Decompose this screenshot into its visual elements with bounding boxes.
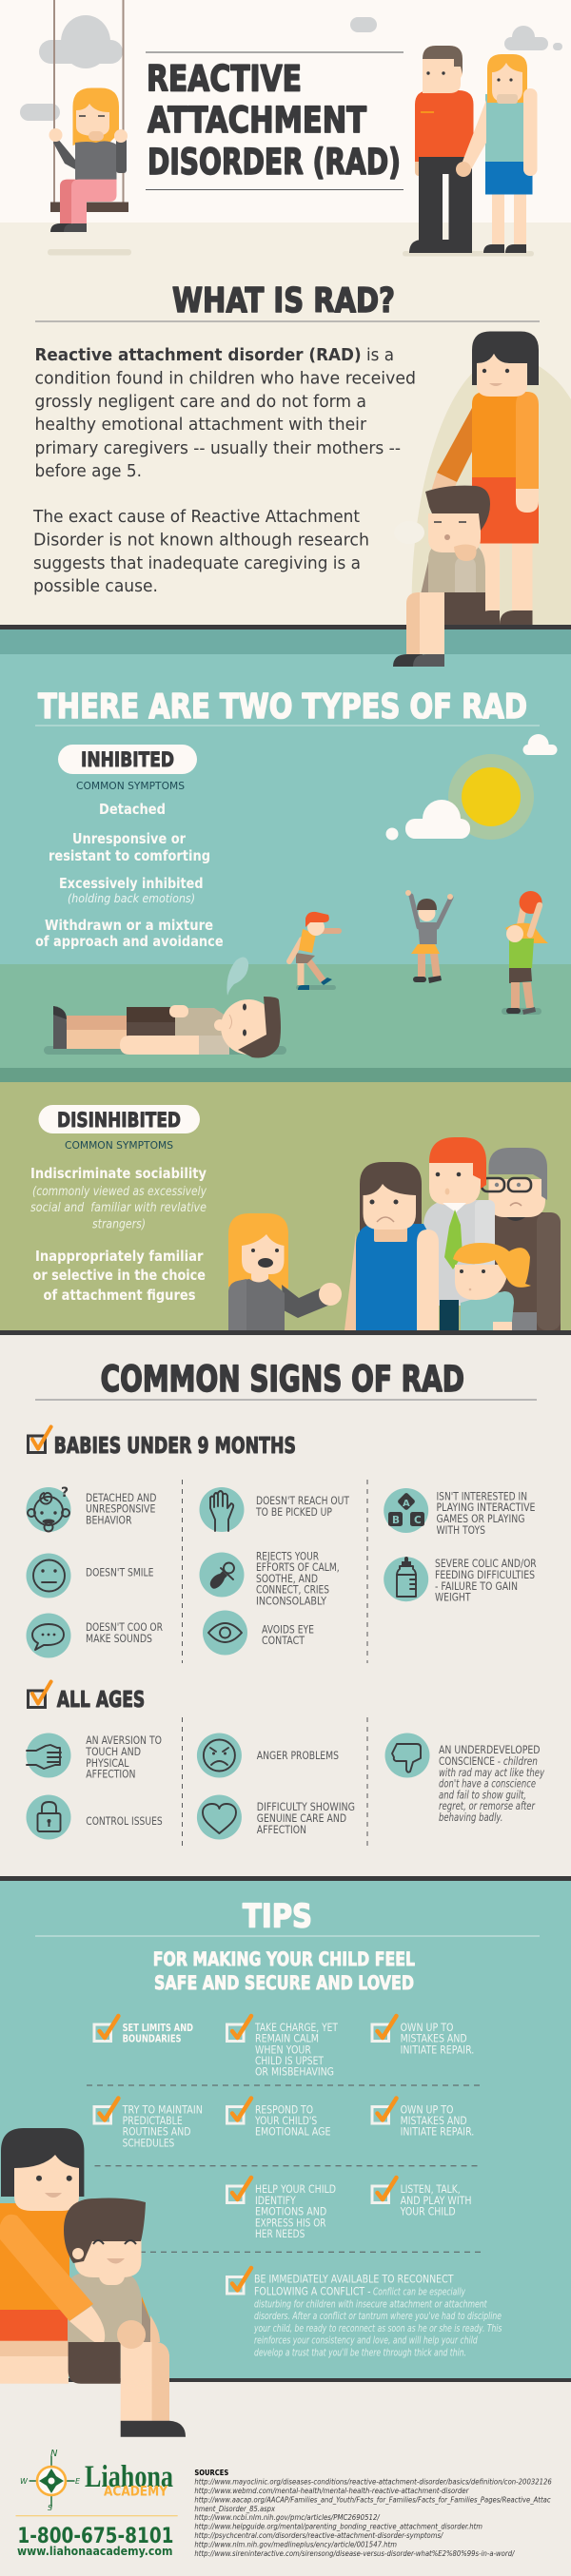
tip: set limits and boundaries: BOUNDARIES [123,2033,182,2045]
dashed column dividers: all ages [183,1717,367,1847]
tip: be immediately available: Conflict can be especially [373,2286,466,2297]
item: isn't interested: WITH TOYS [436,1523,485,1537]
item: severe colic: - FAILURE TO GAIN [435,1579,518,1593]
title [146,52,404,190]
panel: disinhibited symptoms: DISINHIBITED [57,1109,181,1132]
item: difficulty showing care [257,1800,355,1836]
panel: inhibited symptoms: Unresponsive or [72,830,187,847]
icon: baby with question mark [27,1485,70,1532]
panel: disinhibited symptoms: (commonly viewed as excessively [32,1185,207,1199]
illustration: mother and seated son [393,331,571,667]
tip: respond to emotional age: EMOTIONAL AGE [255,2125,331,2139]
tip: own up to mistakes: INITIATE REPAIR. [401,2043,474,2056]
item: detached and unresponsive [86,1491,157,1527]
heading: common signs of RAD: COMMON SIGNS OF RAD [101,1359,464,1400]
tip: take charge: REMAIN CALM [255,2032,319,2045]
item: underdeveloped conscience: regret, or remorse after [439,1799,536,1812]
icon: thumbs down [384,1733,430,1778]
contact: phone and website: 1-800-675-8101 [17,2525,174,2548]
tip: help identify emotions: EMOTIONS AND [255,2205,326,2218]
subheading: for making your child feel: SAFE AND SECURE AND LOVED [154,1972,414,1994]
logo: Liahona Academy compass: S [48,2504,52,2512]
tip: be immediately available: develop a trust that you'll be there through thick and thin. [254,2347,466,2358]
item: avoids eye contact: AVOIDS EYE [262,1622,314,1636]
tip: own up to mistakes [372,2016,474,2056]
contact: phone and website [15,2516,178,2558]
tip: be immediately available: FOLLOWING A CONFLICT - [254,2284,371,2297]
item: rejects your efforts: EFFORTS OF CALM, [256,1560,340,1574]
item: underdeveloped conscience: don't have a conscience [439,1777,536,1791]
item: rejects your efforts: REJECTS YOUR [256,1550,319,1563]
heading: tips: TIPS [243,1898,312,1936]
item: aversion to touch: TOUCH AND [85,1745,141,1758]
item: underdeveloped conscience: and fail to show guilt, [439,1788,526,1801]
tip: help identify emotions: HELP YOUR CHILD [255,2182,336,2196]
title: DISORDER (RAD) [148,142,401,183]
item: underdeveloped conscience: behaving badly. [439,1811,502,1824]
tip: listen, talk, play: YOUR CHILD [400,2205,456,2218]
tip: respond to emotional age: RESPOND TO [255,2102,313,2116]
item: underdeveloped conscience: CONSCIENCE - children [439,1754,538,1768]
tip: be immediately available: BE IMMEDIATELY AVAILABLE TO RECONNECT [254,2273,454,2286]
text block: definition: condition found in children who have received [34,369,416,388]
text block: sources: http://www.helpguide.org/mental/parenting_bonding_reactive_attachment_disorder.htm [194,2523,482,2531]
icon: neutral face [27,1554,70,1598]
item: severe colic: SEVERE COLIC AND/OR [435,1557,537,1570]
tip: set limits and boundaries [94,2016,193,2045]
icon: speech bubble [27,1613,70,1658]
subheading: for making your child feel [153,1948,415,1994]
panel: inhibited symptoms: Excessively inhibited [59,875,204,892]
item: rejects your efforts: INCONSOLABLY [256,1594,327,1607]
item: doesn't coo: MAKE SOUNDS [86,1632,152,1645]
tip: listen, talk, play [372,2178,472,2218]
text block: definition: Reactive attachment disorder (RAD) is a [34,346,394,365]
tip: predictable routines: SCHEDULES [123,2137,174,2150]
panel: disinhibited symptoms: of attachment figures [44,1287,196,1304]
tip: predictable routines: PREDICTABLE [123,2114,183,2127]
tip: listen, talk, play: AND PLAY WITH [401,2194,472,2207]
icon: baby bottle [384,1557,428,1601]
item: aversion to touch: AFFECTION [86,1768,135,1781]
text block: exact cause: possible cause. [33,577,158,596]
tip: take charge: WHEN YOUR [255,2043,311,2056]
text block: definition [34,346,416,481]
illustration: man and woman couple [403,46,537,257]
text block: definition: grossly negligent care and do not form a [34,393,366,412]
text block: definition: healthy emotional attachment with their [34,416,367,435]
tip: help identify emotions [226,2178,336,2240]
text block: sources: http://www.webmd.com/mental-health/mental-health-reactive-attachment-disorder [194,2487,469,2495]
tip: own up to mistakes: OWN UP TO [401,2021,453,2034]
icon: angry face [197,1733,242,1778]
tip: take charge: TAKE CHARGE, YET [254,2021,339,2034]
tip: respond to emotional age: YOUR CHILD'S [254,2114,317,2127]
panel: inhibited symptoms: COMMON SYMPTOMS [76,780,185,792]
subheading: all ages: ALL AGES [57,1688,145,1713]
logo: Liahona Academy compass: W [20,2477,29,2486]
tip: listen, talk, play: LISTEN, TALK, [401,2182,461,2196]
item: isn't interested [436,1489,535,1537]
item: rejects your efforts [256,1550,340,1607]
subheading: babies under 9 months [29,1426,296,1459]
text block: exact cause: suggests that inadequate caregiving is a [33,554,361,573]
item: rejects your efforts: CONNECT, CRIES [256,1583,329,1597]
item: aversion to touch: PHYSICAL [86,1756,129,1770]
title: ATTACHMENT [148,100,367,141]
item: isn't interested: GAMES OR PLAYING [436,1512,525,1525]
icon: pacifier [200,1552,244,1598]
text block: exact cause [32,508,369,596]
item: detached and unresponsive: DETACHED AND [86,1491,157,1504]
clouds: header [20,15,562,121]
text block: definition: before age 5. [34,462,142,481]
illustration: boy lying on the ground [44,957,286,1057]
item: rejects your efforts: SOOTHE, AND [256,1572,318,1585]
icon: ABC blocks [384,1488,428,1533]
panel: disinhibited symptoms: or selective in the choice [32,1267,206,1284]
title: REACTIVE [147,59,302,99]
item: avoids eye contact: CONTACT [262,1634,305,1647]
text block: exact cause: The exact cause of Reactive Attachment [32,508,360,527]
panel: disinhibited symptoms: Indiscriminate sociability [30,1165,207,1182]
illustration: child with outstretched arm [289,912,339,990]
tip: predictable routines [94,2098,203,2150]
tip: help identify emotions: EXPRESS HIS OR [255,2216,325,2229]
icon: eye [203,1611,247,1655]
illustration: girl on swing [48,0,131,255]
icon: padlock [27,1795,70,1839]
tip: own up to mistakes repeat: MISTAKES AND [401,2114,467,2127]
panel: disinhibited symptoms: social and familiar with revlative [30,1201,207,1215]
tip: be immediately available: reinforces your consistency and love, and will help your child [254,2335,478,2347]
panel: disinhibited symptoms: COMMON SYMPTOMS [65,1139,173,1152]
icon: sun [448,754,534,840]
text block: sources: http://www.ncbi.nlm.nih.gov/pmc/articles/PMC2690512/ [194,2513,381,2522]
tip: be immediately available: disturbing for children with insecure attachment or attachment [254,2298,487,2310]
panel: inhibited symptoms: of approach and avoidance [35,933,224,950]
illustration: woman in blue dress [345,1162,439,1330]
text block: exact cause: Disorder is not known although research [33,531,369,550]
item: avoids eye contact [262,1622,314,1647]
text block: definition: primary caregivers -- usually their mothers -- [34,439,401,458]
dashed row dividers: tips [87,2085,483,2252]
text block: sources: hment_Disorder_85.aspx [194,2505,275,2513]
subheading: babies under 9 months: BABIES UNDER 9 MONTHS [54,1434,296,1459]
panel: disinhibited symptoms [30,1105,207,1304]
item: doesn't reach out: DOESN'T REACH OUT [256,1494,350,1507]
logo: Liahona Academy compass: N [50,2449,58,2459]
tip: predictable routines: ROUTINES AND [123,2125,191,2139]
tip: own up to mistakes repeat: INITIATE REPAIR. [401,2125,474,2139]
panel: disinhibited symptoms: strangers) [92,1217,146,1232]
item: isn't interested: ISN'T INTERESTED IN [436,1489,527,1502]
text block: sources: http://www.nlm.nih.gov/medlineplus/ency/article/001547.htm [194,2540,397,2548]
item: detached and unresponsive: UNRESPONSIVE [86,1502,155,1516]
item: doesn't coo [86,1620,163,1645]
illustration: child with arms raised [405,890,453,983]
panel: inhibited symptoms [35,745,224,950]
tip: take charge [226,2016,339,2079]
item: severe colic: FEEDING DIFFICULTIES [435,1568,535,1581]
tip: be immediately available [226,2268,502,2358]
item: detached and unresponsive: BEHAVIOR [86,1514,131,1527]
panel: inhibited symptoms: Detached [99,801,166,818]
tip: own up to mistakes: MISTAKES AND [401,2032,467,2045]
text block: sources: http://www.sireninteractive.com/sirensong/disease-versus-disorder-what%E2%80%99s-in-a-word/ [194,2549,516,2558]
item: doesn't reach out: TO BE PICKED UP [255,1505,332,1519]
item: doesn't coo: DOESN'T COO OR [86,1620,163,1634]
illustration: child holding a ball [502,891,548,1015]
panel: disinhibited symptoms: Inappropriately familiar [35,1248,204,1265]
item: aversion to touch: AN AVERSION TO [86,1733,162,1747]
item: anger problems: ANGER PROBLEMS [257,1749,339,1762]
illustration: grandfather with glasses [482,1148,561,1330]
illustration: mother hugging son [0,2128,186,2437]
panel: inhibited symptoms: (holding back emotions) [68,891,195,905]
item: severe colic [435,1557,537,1604]
subheading: all ages [29,1681,145,1713]
item: doesn't smile: DOESN'T SMILE [86,1565,154,1579]
tip: help identify emotions: HER NEEDS [255,2227,305,2240]
icon: ABC blocks: C [414,1515,422,1526]
item: underdeveloped conscience: AN UNDERDEVELOPED [439,1743,541,1756]
item: difficulty showing care: AFFECTION [257,1823,306,1836]
tip: own up to mistakes repeat [372,2098,474,2139]
item: control issues: CONTROL ISSUES [86,1814,163,1828]
subheading: for making your child feel: FOR MAKING YOUR CHILD FEEL [153,1948,415,1970]
panel: inhibited symptoms: Withdrawn or a mixture [45,917,213,934]
tip: help identify emotions: IDENTIFY [255,2194,297,2207]
panel: inhibited symptoms: resistant to comforting [49,847,210,864]
item: difficulty showing care: DIFFICULTY SHOWING [257,1800,355,1813]
icon: ABC blocks: B [392,1515,400,1526]
tip: respond to emotional age [226,2098,331,2139]
contact: phone and website: www.liahonaacademy.com [17,2544,172,2558]
tip: set limits and boundaries: SET LIMITS AND [123,2022,193,2034]
item: severe colic: WEIGHT [435,1591,471,1604]
tip: predictable routines: TRY TO MAINTAIN [122,2102,203,2116]
logo: Liahona Academy compass: ACADEMY [104,2484,168,2499]
item: difficulty showing care: GENUINE CARE AND [257,1811,346,1825]
logo: Liahona Academy compass: E [75,2477,81,2486]
clouds: sky [386,734,558,841]
item: aversion to touch [85,1733,162,1781]
item: underdeveloped conscience [439,1743,544,1824]
text block: sources: http://psychcentral.com/disorders/reactive-attachment-disorder-symptoms/ [194,2531,444,2540]
tip: take charge: OR MISBEHAVING [255,2065,334,2079]
icon: heart [197,1795,242,1839]
text block: sources [194,2469,552,2558]
icon: ABC blocks: A [403,1499,410,1509]
dashed column dividers: babies [183,1480,367,1663]
logo: Liahona Academy compass: Liahona [85,2460,173,2494]
illustration: man with green tie [423,1137,495,1330]
item: isn't interested: PLAYING INTERACTIVE [436,1501,535,1514]
icon: baby with question mark: ? [61,1485,69,1501]
tip: take charge: CHILD IS UPSET [255,2054,325,2067]
illustration: girl talking with outstretched arm [228,1213,342,1330]
panel: inhibited symptoms: INHIBITED [81,748,174,771]
illustration: little girl with ponytail [453,1243,531,1330]
logo: Liahona Academy compass [20,2449,173,2512]
icon: raised hand [200,1487,244,1532]
text block: sources: SOURCES [194,2469,228,2477]
item: doesn't reach out [255,1494,350,1519]
icon: hand held out [27,1733,70,1778]
heading: what is RAD: WHAT IS RAD? [172,281,395,320]
tip: own up to mistakes repeat: OWN UP TO [401,2102,453,2116]
